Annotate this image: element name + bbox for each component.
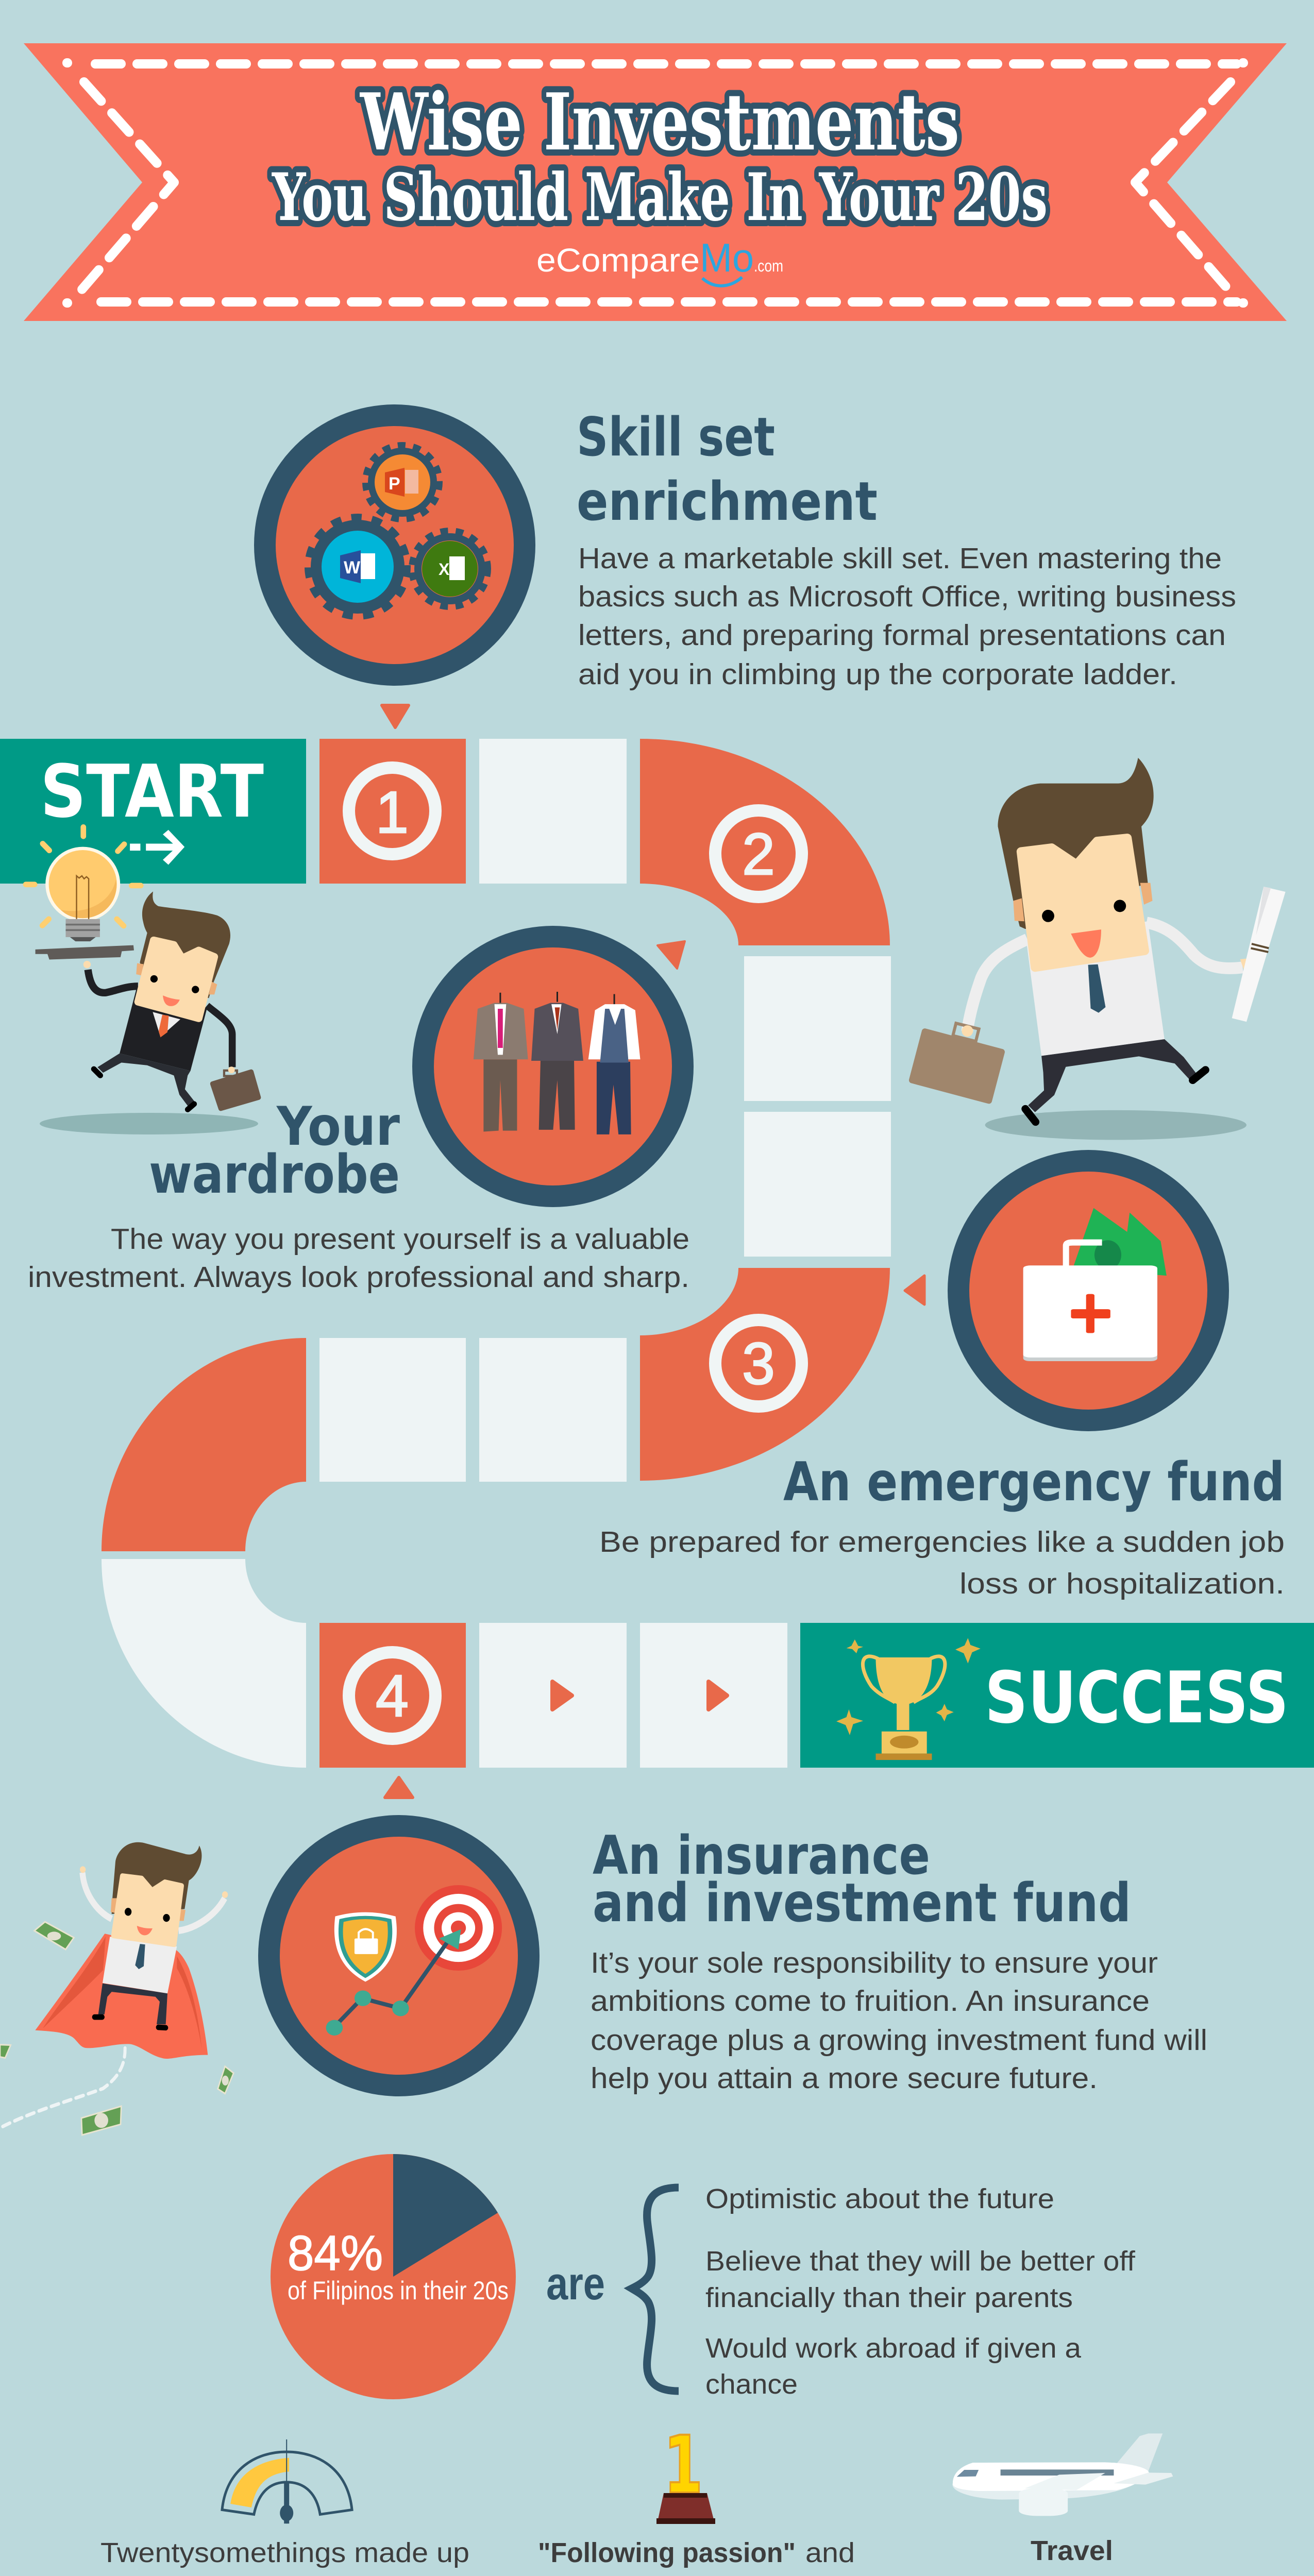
circle icon: first aid kit with cash	[948, 1150, 1229, 1431]
panel: an emergency fund	[599, 1150, 1285, 1600]
circle icon: shield and target	[258, 1815, 540, 2096]
body text: It’s your sole responsibility to ensure your	[591, 1946, 1158, 1979]
body text: letters, and preparing formal presentations can	[578, 619, 1226, 652]
blank square	[319, 1338, 466, 1482]
circle icon: office gears: P	[389, 474, 400, 494]
text: Twentysomethings made up	[100, 2537, 469, 2568]
arrow: wardrobe to tile	[658, 941, 685, 969]
money bills	[0, 1922, 233, 2135]
body text	[599, 1526, 1285, 1600]
title text	[272, 76, 1048, 235]
body text	[578, 542, 1236, 691]
blank square	[479, 1338, 627, 1482]
body text	[591, 1946, 1207, 2095]
chart: 84 percent pie: 84%	[288, 2226, 383, 2281]
eCompareMo logo	[536, 235, 783, 286]
blank square	[744, 956, 891, 1101]
square 1: 1	[376, 780, 409, 845]
circle icon: suits on hangers	[412, 926, 694, 1207]
list of beliefs: chance	[705, 2369, 798, 2400]
chart: 84 percent pie: of Filipinos in their 20s	[288, 2276, 509, 2305]
square with arrow	[640, 1623, 787, 1768]
list of beliefs: financially than their parents	[705, 2282, 1073, 2313]
curved orange tile	[102, 1338, 306, 1551]
curved tile 2: 2	[742, 822, 775, 887]
brace	[632, 2188, 679, 2391]
body text: The way you present yourself is a valuable	[111, 1223, 689, 1256]
text: and	[805, 2537, 855, 2568]
stat: travel	[915, 2433, 1230, 2576]
body text: investment. Always look professional and sharp.	[28, 1261, 689, 1294]
success tile	[800, 1623, 1314, 1768]
panel: your wardrobe	[28, 926, 694, 1294]
body text	[28, 1223, 689, 1294]
body text: coverage plus a growing investment fund will	[591, 2024, 1207, 2057]
ribbon shape	[24, 43, 1287, 321]
body text: Have a marketable skill set. Even mastering the	[578, 542, 1222, 575]
serving tray	[36, 945, 134, 959]
character: waiter with light bulb	[26, 827, 259, 1134]
panel: skill set enrichment	[254, 404, 1236, 727]
heading: An insurance	[593, 1825, 930, 1887]
icon: trophy	[836, 1638, 981, 1760]
board game path	[0, 739, 1314, 1768]
title text: Wise Investments	[359, 76, 959, 168]
label: are: are	[546, 2258, 605, 2310]
heading: and investment fund	[593, 1872, 1131, 1934]
icon: briefcase	[912, 1023, 1002, 1100]
stat: definitions of success	[530, 2419, 865, 2576]
curved tile 3	[640, 1268, 890, 1481]
arrow: kit to tile 3	[905, 1276, 924, 1304]
title banner	[24, 43, 1287, 321]
blank square	[479, 739, 627, 884]
square 4: 4	[376, 1664, 409, 1729]
body text: Be prepared for emergencies like a sudden job	[599, 1526, 1285, 1558]
icon: light bulb	[26, 827, 141, 941]
text	[915, 2535, 1230, 2576]
text: "Following passion"	[538, 2537, 796, 2568]
eCompareMo logo: .com	[754, 257, 783, 275]
square with arrow	[479, 1623, 627, 1768]
eCompareMo logo: Mo	[700, 235, 754, 280]
heading: enrichment	[577, 471, 878, 533]
circle icon: office gears: X	[439, 560, 450, 579]
character: flying superhero with money	[0, 1842, 233, 2135]
body text: aid you in climbing up the corporate ladder.	[578, 658, 1177, 691]
body text: help you attain a more secure future.	[591, 2062, 1098, 2095]
heading	[149, 1096, 400, 1206]
square 1	[319, 739, 466, 884]
text	[530, 2537, 865, 2576]
icon: airplane	[953, 2433, 1173, 2516]
list of beliefs	[705, 2183, 1136, 2400]
eCompareMo logo: eCompare	[536, 242, 700, 279]
heading	[577, 406, 878, 533]
heading	[593, 1825, 1131, 1934]
start tile	[0, 739, 306, 884]
body text: loss or hospitalization.	[959, 1567, 1285, 1600]
arrow: down to square 1	[382, 705, 409, 727]
blank square	[744, 1112, 891, 1257]
start tile: START	[40, 750, 264, 834]
curved white tile	[102, 1559, 306, 1768]
icon: paper scroll	[1232, 887, 1286, 1022]
arrow: up to square 4	[385, 1777, 413, 1798]
heading: Your	[276, 1096, 400, 1158]
heading: wardrobe	[149, 1144, 400, 1206]
list of beliefs: Optimistic about the future	[705, 2183, 1054, 2214]
character: running businessman	[912, 758, 1286, 1140]
curved tile 3: 3	[742, 1331, 775, 1397]
circle icon: office gears: W	[344, 558, 361, 578]
stat: workforce	[100, 2439, 469, 2576]
body text: ambitions come to fruition. An insurance	[591, 1985, 1150, 2018]
heading: Skill set	[577, 406, 775, 468]
list of beliefs: Would work abroad if given a	[705, 2333, 1082, 2364]
panel: insurance and investment fund	[258, 1777, 1207, 2096]
title text: You Should Make In Your 20s	[272, 159, 1048, 235]
stitched dashes	[67, 63, 1243, 303]
dashed flight trail	[0, 2048, 125, 2128]
chart: 84 percent pie	[271, 2154, 516, 2399]
list of beliefs: Believe that they will be better off	[705, 2246, 1136, 2277]
icon: number one trophy: 1	[664, 2419, 703, 2512]
square 4	[319, 1623, 466, 1768]
body text: basics such as Microsoft Office, writing business	[578, 580, 1236, 613]
briefcase	[212, 1066, 259, 1109]
curved tile 2	[640, 739, 890, 945]
text: Travel	[1031, 2535, 1113, 2566]
circle icon: office gears	[254, 404, 535, 686]
icon: gauge	[222, 2439, 352, 2523]
